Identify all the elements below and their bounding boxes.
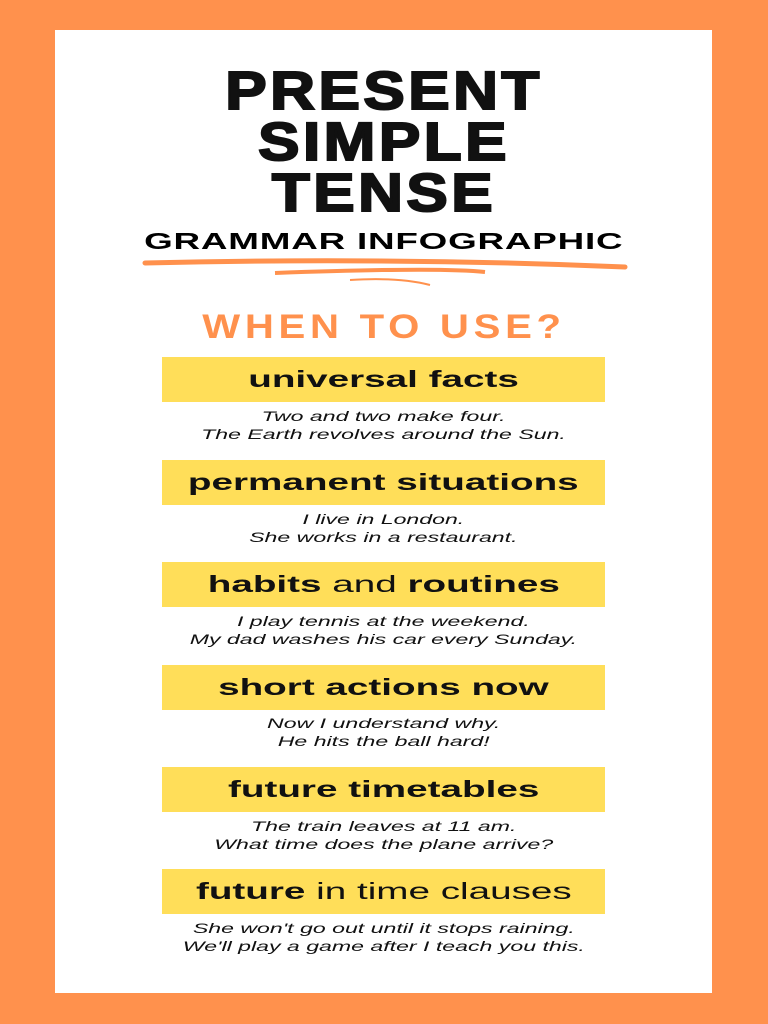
- examples 5: The train leaves at 11 am.: [251, 818, 516, 834]
- bar: future in time clauses: [162, 869, 605, 914]
- examples 2: I live in London.: [303, 511, 464, 527]
- brush stroke underline: [142, 258, 628, 286]
- examples 2: [249, 511, 518, 545]
- examples 6: We'll play a game after I teach you this.: [182, 938, 585, 954]
- title: SIMPLE: [258, 112, 510, 172]
- bar: future timetables: future timetables: [228, 776, 539, 802]
- bar: habits and routines: habits and routines: [207, 571, 560, 597]
- subtitle: GRAMMAR INFOGRAPHIC: [144, 228, 624, 254]
- bar: universal facts: universal facts: [248, 366, 519, 392]
- bar: habits and routines: [162, 562, 605, 607]
- bar: future timetables: [162, 767, 605, 812]
- examples 2: She works in a restaurant.: [249, 529, 518, 545]
- title: PRESENT: [225, 61, 543, 121]
- bar: short actions now: [162, 665, 605, 710]
- bar: universal facts: [162, 357, 605, 402]
- examples 6: [182, 920, 585, 954]
- examples 4: He hits the ball hard!: [278, 733, 489, 749]
- examples 6: She won't go out until it stops raining.: [193, 920, 574, 936]
- examples 4: [267, 715, 500, 749]
- heading: when to use: WHEN TO USE?: [202, 308, 566, 346]
- examples 1: [201, 408, 566, 442]
- examples 5: [214, 818, 554, 852]
- bar: permanent situations: permanent situations: [188, 469, 579, 495]
- examples 5: What time does the plane arrive?: [214, 836, 553, 852]
- bar: permanent situations: [162, 460, 605, 505]
- examples 3: [190, 613, 577, 647]
- bar: short actions now: short actions now: [218, 674, 549, 700]
- title: TENSE: [272, 163, 496, 223]
- examples 4: Now I understand why.: [267, 715, 500, 731]
- examples 1: The Earth revolves around the Sun.: [201, 426, 566, 442]
- bar: future in time clauses: future in time clauses: [196, 878, 571, 904]
- examples 1: Two and two make four.: [262, 408, 505, 424]
- examples 3: I play tennis at the weekend.: [237, 613, 530, 629]
- title: [225, 61, 543, 223]
- examples 3: My dad washes his car every Sunday.: [190, 631, 577, 647]
